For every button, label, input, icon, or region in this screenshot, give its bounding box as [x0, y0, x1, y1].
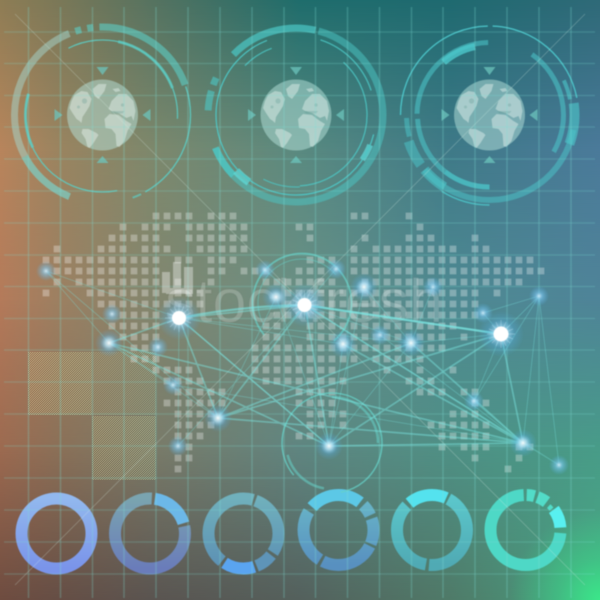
- dial 2 direction arrows: [248, 67, 344, 163]
- node: large 1: [157, 296, 201, 340]
- donut chart 5: [397, 495, 467, 565]
- dotted world map: [43, 216, 544, 469]
- donut chart 1: [22, 498, 92, 568]
- node: large 3: [478, 311, 524, 357]
- icon: dial 2 globe: [260, 80, 332, 150]
- dial 1 outer arcs: [0, 0, 220, 233]
- thick links: [109, 305, 523, 446]
- dial 1 direction arrows: [54, 67, 150, 163]
- map HUD ring upper: [232, 233, 372, 373]
- dial 3 outer arcs: [371, 0, 600, 234]
- icon: dial 3 globe: [454, 80, 525, 150]
- donut chart 4: [304, 495, 374, 565]
- network connection lines: [46, 269, 559, 465]
- dial 1 inner arcs: [0, 13, 205, 217]
- HUD dial 1 with globe: [0, 0, 220, 233]
- dial 2 outer arcs: [173, 0, 419, 238]
- donut chart 6: [490, 495, 560, 565]
- network nodes: [36, 259, 569, 475]
- icon: dial 1 globe: [67, 80, 138, 150]
- node: medium group: [95, 273, 537, 460]
- node: large 2: [282, 283, 326, 327]
- map HUD ring lower: [262, 373, 402, 513]
- dial 3 inner arcs: [386, 12, 593, 218]
- node: small group: [36, 259, 569, 475]
- HUD dial 3 with globe: [371, 0, 600, 234]
- watermark: [162, 262, 443, 335]
- watermark text: stockfresh: [165, 267, 443, 335]
- watermark logo bars: [162, 262, 193, 294]
- donut chart 3: [208, 498, 278, 568]
- dial 2 inner arcs: [196, 15, 396, 215]
- donut chart 2: [115, 498, 185, 568]
- HUD dial 2 with globe: [173, 0, 419, 238]
- dial 3 direction arrows: [442, 67, 538, 163]
- thin links: [46, 269, 559, 465]
